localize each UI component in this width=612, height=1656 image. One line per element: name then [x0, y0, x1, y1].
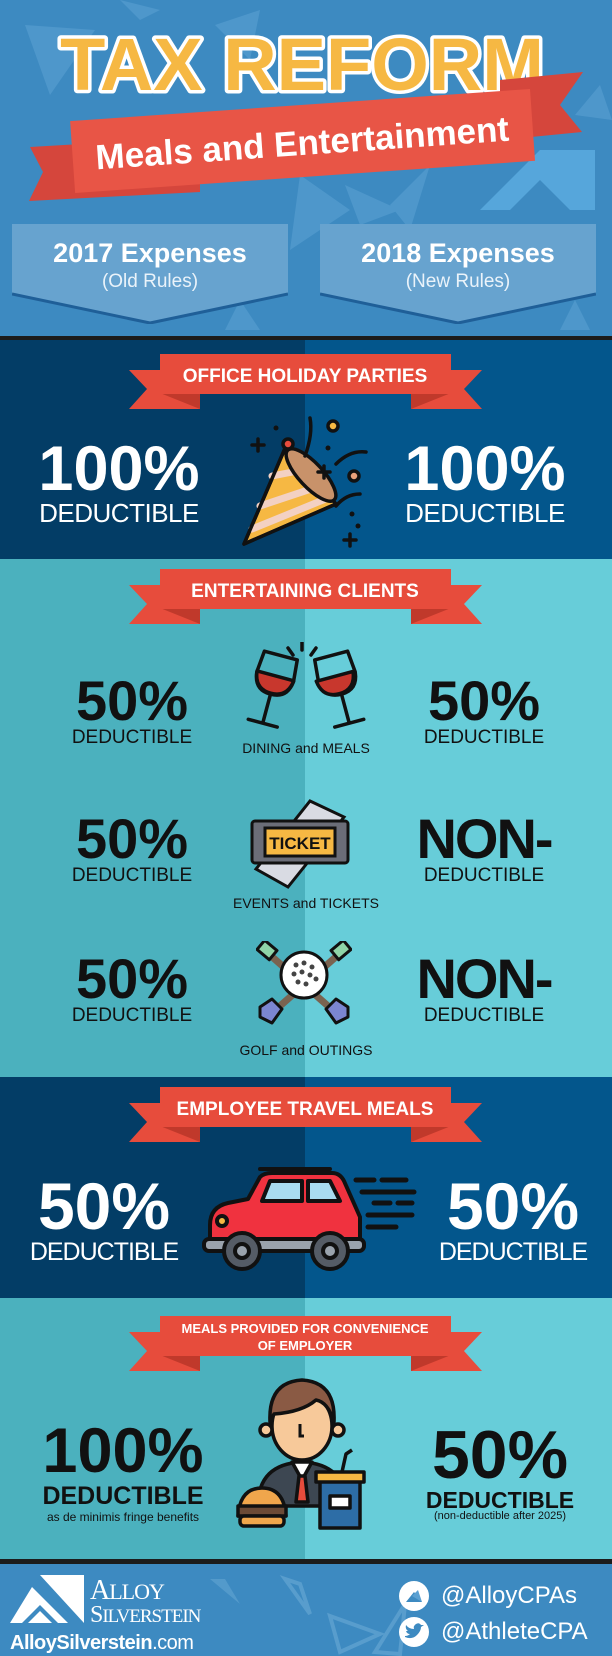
social: AlloyCPAs: @AlloyCPAs — [441, 1582, 577, 1609]
title: TAX REFORM: TAX REFORM — [60, 23, 544, 105]
logo: Alloy Silverstein — [10, 1575, 201, 1628]
panel: meals provided for convenience of employer: DEDUCTIBLE — [426, 1487, 574, 1513]
label: dining and meals: DINING and MEALS — [242, 740, 370, 756]
panel: entertaining clients: DEDUCTIBLE — [424, 1005, 544, 1026]
panel: employee travel meals — [0, 1077, 612, 1298]
social: AthleteCPA — [399, 1617, 588, 1647]
panel: meals provided for convenience of employer — [0, 1298, 612, 1559]
box: 2017 Expenses: 2017 Expenses — [53, 238, 247, 268]
row: dining 2017: 50% — [76, 669, 188, 732]
panel: meals provided for convenience of employer: as de minimis fringe benefits — [47, 1510, 199, 1524]
banner: employee travel meals — [129, 1087, 482, 1142]
icon: golf — [256, 941, 352, 1024]
banner: meals provided: OF EMPLOYER — [258, 1338, 353, 1353]
banner: meals provided: MEALS PROVIDED FOR CONVENIENCE — [181, 1321, 429, 1336]
banner: office holiday parties: OFFICE HOLIDAY PARTIES — [183, 366, 427, 387]
panel: entertaining clients: DEDUCTIBLE — [72, 865, 192, 886]
panel: office holiday parties: DEDUCTIBLE — [405, 498, 565, 528]
box: 2018 Expenses: (New Rules) — [406, 271, 510, 292]
panel: employee travel meals: DEDUCTIBLE — [439, 1238, 587, 1266]
subtitle ribbon: Meals and Entertainment: Meals and Entertainment — [94, 110, 511, 177]
panel: entertaining clients — [0, 559, 612, 1077]
footer — [0, 1564, 612, 1656]
social: AlloyCPAs — [399, 1581, 577, 1611]
box: 2017 Expenses: (Old Rules) — [102, 271, 198, 292]
panel: entertaining clients: DEDUCTIBLE — [424, 865, 544, 886]
2018 value: 50% — [447, 1169, 579, 1243]
box: 2017 Expenses — [12, 224, 288, 324]
panel: meals provided for convenience of employer: DEDUCTIBLE — [42, 1482, 204, 1510]
panel: entertaining clients: DEDUCTIBLE — [424, 727, 544, 748]
panel: entertaining clients: DEDUCTIBLE — [72, 1005, 192, 1026]
panel: office holiday parties — [0, 340, 612, 559]
row: events 2018: NON- — [416, 807, 552, 870]
subtitle ribbon: Meals and Entertainment — [29, 72, 583, 201]
icon: ticket: TICKET — [269, 834, 331, 853]
row: golf 2017: 50% — [76, 947, 188, 1010]
header panel — [0, 0, 612, 336]
icon: wine glasses — [246, 642, 366, 729]
box: 2018 Expenses: 2018 Expenses — [361, 238, 555, 268]
banner: employee travel meals: EMPLOYEE TRAVEL MEALS — [177, 1099, 433, 1120]
logo: Alloy Silverstein: SILVERSTEIN — [90, 1602, 200, 1628]
banner: entertaining clients: ENTERTAINING CLIENTS — [191, 581, 419, 602]
logo: Alloy Silverstein: ALLOY — [90, 1575, 164, 1606]
2017 value: 50% — [38, 1169, 170, 1243]
banner: meals provided — [129, 1316, 482, 1371]
icon: ticket — [250, 799, 350, 889]
row: events 2017: 50% — [76, 807, 188, 870]
label: golf and outings: GOLF and OUTINGS — [239, 1042, 373, 1058]
banner: office holiday parties — [129, 354, 482, 409]
box: 2018 Expenses — [320, 224, 596, 324]
icon: party popper — [242, 416, 368, 548]
2018 value: 50% — [432, 1417, 568, 1493]
label: events and tickets: EVENTS and TICKETS — [233, 895, 379, 911]
panel: entertaining clients: DEDUCTIBLE — [72, 727, 192, 748]
social: AthleteCPA: @AthleteCPA — [441, 1618, 588, 1645]
2017 value: 100% — [42, 1416, 204, 1486]
row: dining 2018: 50% — [428, 669, 540, 732]
icon: employee with meal — [236, 1378, 366, 1530]
panel: employee travel meals: DEDUCTIBLE — [30, 1238, 178, 1266]
icon: car — [202, 1167, 416, 1271]
2018 value: 100% — [404, 434, 566, 504]
panel: meals provided for convenience of employer: (non-deductible after 2025) — [434, 1510, 566, 1522]
website: AlloySilverstein.com — [10, 1632, 193, 1654]
banner: entertaining clients — [129, 569, 482, 624]
2017 value: 100% — [38, 434, 200, 504]
panel: office holiday parties: DEDUCTIBLE — [39, 498, 199, 528]
row: golf 2018: NON- — [416, 947, 552, 1010]
